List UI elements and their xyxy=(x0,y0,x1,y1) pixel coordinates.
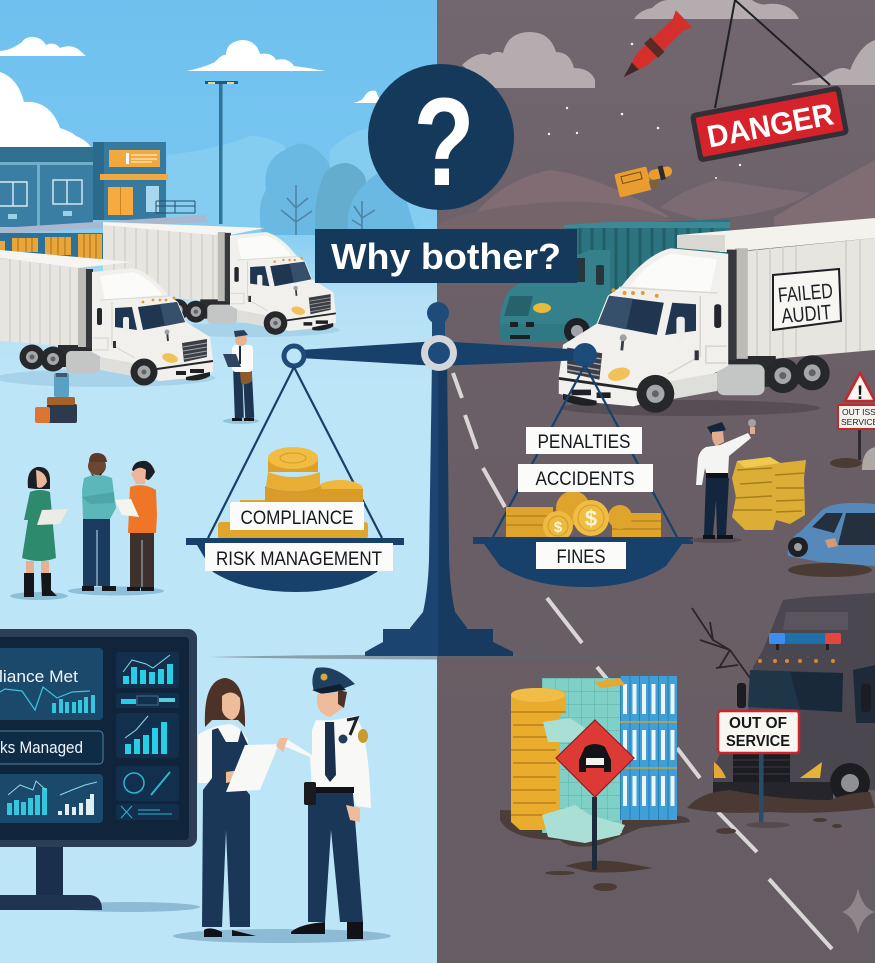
clouds left xyxy=(0,37,381,147)
dashboard monitor xyxy=(0,629,200,912)
teal container truck xyxy=(500,219,730,344)
right pan xyxy=(473,537,693,587)
label: compliance xyxy=(230,502,364,530)
distant hills and trees left xyxy=(167,127,420,235)
label: risk management: RISK MANAGEMENT xyxy=(216,549,382,570)
left coins xyxy=(218,447,368,539)
question mark circle xyxy=(368,64,514,212)
right coins: $ xyxy=(554,519,563,536)
dirt patches xyxy=(545,828,736,891)
out of service sign xyxy=(718,711,799,753)
label: fines xyxy=(536,542,626,569)
stacks of money, coins and binders xyxy=(500,676,690,847)
label: failed audit: FAILED xyxy=(777,280,834,307)
road markings right xyxy=(453,373,832,949)
label: risk management xyxy=(205,543,393,571)
left background xyxy=(0,0,438,963)
panel: compliance met xyxy=(0,648,103,720)
label: penalties: PENALTIES xyxy=(538,432,630,453)
icon: orange tool xyxy=(614,161,675,198)
clouds right xyxy=(462,0,875,88)
danger sign: DANGER xyxy=(704,96,836,155)
inspector with clipboard xyxy=(223,330,259,424)
label: compliance: COMPLIANCE xyxy=(240,508,354,529)
out of service sign: SERVICE xyxy=(726,733,790,750)
beam xyxy=(300,341,585,366)
out of service sign: OUT OF xyxy=(729,715,787,732)
bare tree xyxy=(692,608,750,678)
truck back left xyxy=(103,222,340,337)
label: accidents xyxy=(518,464,653,492)
heading banner xyxy=(315,229,577,283)
building xyxy=(0,142,209,259)
question mark circle: ? xyxy=(413,72,475,212)
officer xyxy=(696,419,756,539)
right coins xyxy=(506,491,661,541)
danger sign xyxy=(690,0,849,163)
warning signs right xyxy=(830,373,875,470)
right chains xyxy=(493,365,677,537)
luggage xyxy=(35,373,77,423)
sparkle xyxy=(842,888,875,934)
left pan xyxy=(186,538,404,592)
right coins: $ xyxy=(585,506,597,531)
woman xyxy=(198,678,256,937)
paper xyxy=(226,744,279,792)
label: penalties xyxy=(526,427,642,454)
panel: risks managed xyxy=(0,731,103,764)
icon: red marker xyxy=(615,10,693,86)
panel: bottom chart xyxy=(0,774,103,823)
failed audit truck xyxy=(559,218,875,416)
heading banner: Why bother? xyxy=(331,236,561,277)
panel: compliance met: liance Met xyxy=(0,667,78,686)
label: failed audit: AUDIT xyxy=(781,301,832,328)
icon: hazard diamond sign xyxy=(556,720,653,872)
stand xyxy=(365,360,513,656)
woman in orange xyxy=(115,461,157,591)
right officer with gold xyxy=(690,419,806,543)
panel: risks managed: ks Managed xyxy=(0,738,83,757)
label: accidents: ACCIDENTS xyxy=(536,469,634,490)
warning signs right: ! xyxy=(857,383,863,404)
label: fines: FINES xyxy=(556,547,606,568)
specks xyxy=(548,43,741,179)
out of service truck xyxy=(687,593,875,828)
gold bars xyxy=(732,457,806,530)
right background xyxy=(437,0,875,963)
officer xyxy=(276,667,371,939)
label: failed audit xyxy=(773,269,841,330)
crashed blue car xyxy=(788,503,875,577)
left chains xyxy=(208,367,382,538)
panel: side charts xyxy=(116,652,179,820)
man in teal xyxy=(82,453,116,591)
three people xyxy=(10,453,164,600)
officer and worker xyxy=(173,667,391,943)
hills right xyxy=(437,160,875,230)
truck front left xyxy=(0,250,215,387)
lamp post xyxy=(205,81,238,224)
woman in green xyxy=(22,467,68,597)
scale xyxy=(186,302,693,660)
